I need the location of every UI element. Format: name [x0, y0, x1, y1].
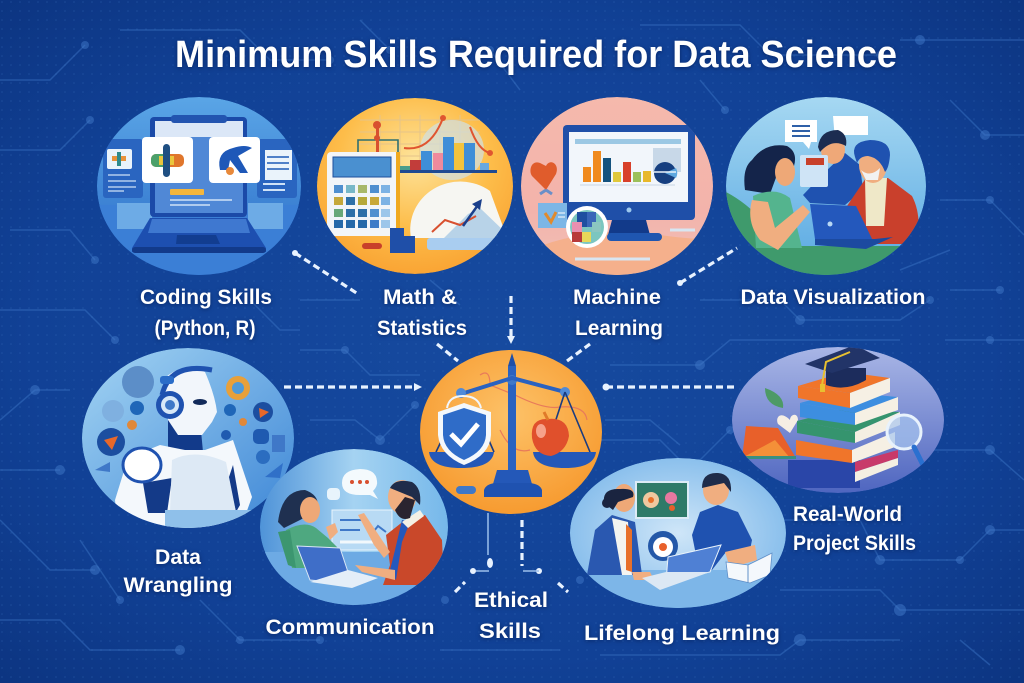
green ground — [726, 192, 900, 275]
left window — [103, 139, 143, 198]
label: coding skills: Coding Skills — [140, 286, 272, 309]
table under books — [788, 460, 860, 488]
label: math and statistics: Statistics — [377, 317, 467, 340]
chart grid — [360, 115, 480, 171]
teal frame and red marker — [357, 121, 399, 152]
label: lifelong learning: Lifelong Learning — [584, 622, 780, 645]
pale hump — [420, 120, 484, 180]
panel: data wrangling illustration — [82, 348, 294, 530]
white streaks — [575, 230, 695, 259]
panel: coding skills illustration — [97, 97, 301, 275]
label: real-world project skills: Project Skills — [793, 532, 916, 555]
right pan — [533, 452, 596, 468]
table — [570, 570, 790, 610]
connector: coding to centre — [292, 250, 358, 294]
label: real-world project skills — [793, 503, 916, 555]
laptop — [642, 545, 721, 590]
title: Minimum Skills Required for Data Science — [175, 34, 897, 76]
presentation board — [332, 510, 392, 550]
circle background — [726, 97, 926, 275]
connector: data wrangling arrow right — [284, 383, 422, 391]
label: ethical skills — [474, 589, 548, 643]
label: ethical skills: Ethical — [474, 589, 548, 612]
robot neck — [168, 420, 203, 452]
man in blue t-shirt — [692, 473, 757, 570]
red pill — [362, 243, 382, 249]
robot head — [163, 368, 217, 435]
connector: ethical skills dotted drop — [470, 513, 542, 574]
circle background — [521, 97, 713, 275]
right window — [257, 139, 297, 198]
label: data wrangling: Data — [155, 546, 201, 569]
bearded man in red sweater — [355, 480, 444, 585]
gauge with arrow — [410, 182, 505, 238]
speech bubble with dots — [327, 469, 378, 500]
circle background — [420, 350, 602, 514]
laptop — [810, 204, 893, 249]
graduation cap — [805, 345, 880, 392]
right man in red jacket — [847, 140, 919, 244]
robot headphones — [156, 368, 212, 419]
app tile: K logo — [209, 137, 260, 183]
blue glove — [390, 228, 415, 253]
small card — [538, 203, 567, 228]
app tile: plus logo — [142, 137, 193, 183]
pan strings — [436, 392, 590, 452]
circle background — [317, 98, 513, 274]
label: data visualization: Data Visualization — [740, 286, 926, 309]
open map book — [742, 426, 796, 459]
circle background — [732, 347, 944, 493]
leaf and heart — [765, 388, 798, 433]
small pills — [456, 486, 476, 494]
monitor side bars and pie — [653, 148, 681, 184]
speech bubbles — [785, 116, 868, 149]
label: data wrangling: Wrangling — [124, 574, 232, 597]
label: machine learning: Machine — [573, 286, 661, 309]
connector: machine learning arrow down — [507, 296, 515, 344]
connector: math to centre — [437, 344, 458, 361]
panel: math and statistics illustration — [317, 98, 513, 274]
label: ethical skills: Skills — [479, 620, 541, 643]
green board — [636, 482, 688, 518]
circle background — [97, 97, 301, 235]
magnifying glass — [887, 415, 927, 473]
connector: real-world arrow left — [602, 384, 734, 390]
background blocks — [117, 203, 283, 229]
lower orange wash — [544, 232, 694, 275]
panel: lifelong learning illustration — [570, 458, 790, 610]
laptop — [297, 546, 378, 588]
book stack — [796, 372, 900, 482]
faint red map lines — [480, 373, 587, 451]
shield with check — [438, 403, 491, 465]
scale post and base — [484, 353, 542, 497]
beam end caps — [456, 387, 570, 398]
scale beam — [461, 378, 565, 394]
label: math and statistics — [377, 286, 467, 340]
label: data wrangling — [124, 546, 232, 597]
woman with dark hair — [744, 145, 810, 250]
label: real-world project skills: Real-World — [793, 503, 902, 526]
lower backdrop — [97, 205, 300, 275]
label: machine learning: Learning — [575, 317, 663, 340]
gears and icons — [95, 366, 285, 478]
left pan — [429, 452, 494, 468]
colour grid lens — [566, 206, 608, 248]
table — [260, 552, 450, 610]
panel: data visualization illustration — [726, 97, 930, 280]
trend lines — [404, 116, 492, 155]
monitor bar chart — [580, 151, 675, 185]
label: machine learning — [573, 286, 663, 340]
man in blue suit — [587, 484, 654, 580]
calculator — [327, 152, 400, 236]
bar chart — [400, 137, 497, 173]
circle background — [82, 348, 294, 528]
woman — [278, 490, 338, 568]
monitor — [563, 125, 695, 241]
apple — [532, 412, 569, 456]
panel: real-world project skills illustration — [732, 345, 944, 493]
circle background — [260, 449, 448, 605]
orange heart icon — [530, 162, 557, 194]
panel: ethical skills illustration — [420, 350, 602, 514]
connector: data visualization to centre — [677, 248, 737, 286]
panel: communication illustration — [260, 449, 450, 610]
label: coding skills — [140, 286, 272, 340]
robot body — [115, 440, 260, 530]
label: communication: Communication — [266, 616, 434, 639]
gear wheel — [648, 531, 678, 561]
ruler — [427, 238, 494, 250]
connector ticks near ethical label — [455, 582, 568, 592]
laptop keyboard — [132, 218, 266, 253]
label: math and statistics: Math & — [383, 286, 457, 309]
circle background — [570, 458, 786, 608]
connector: to right of scale top — [567, 344, 590, 361]
panel: machine learning illustration — [521, 97, 714, 280]
open book — [726, 553, 772, 583]
handle above shield — [447, 396, 481, 408]
laptop screen — [150, 115, 247, 217]
centre man in blue suit — [800, 130, 863, 205]
label: coding skills: (Python, R) — [154, 317, 256, 340]
